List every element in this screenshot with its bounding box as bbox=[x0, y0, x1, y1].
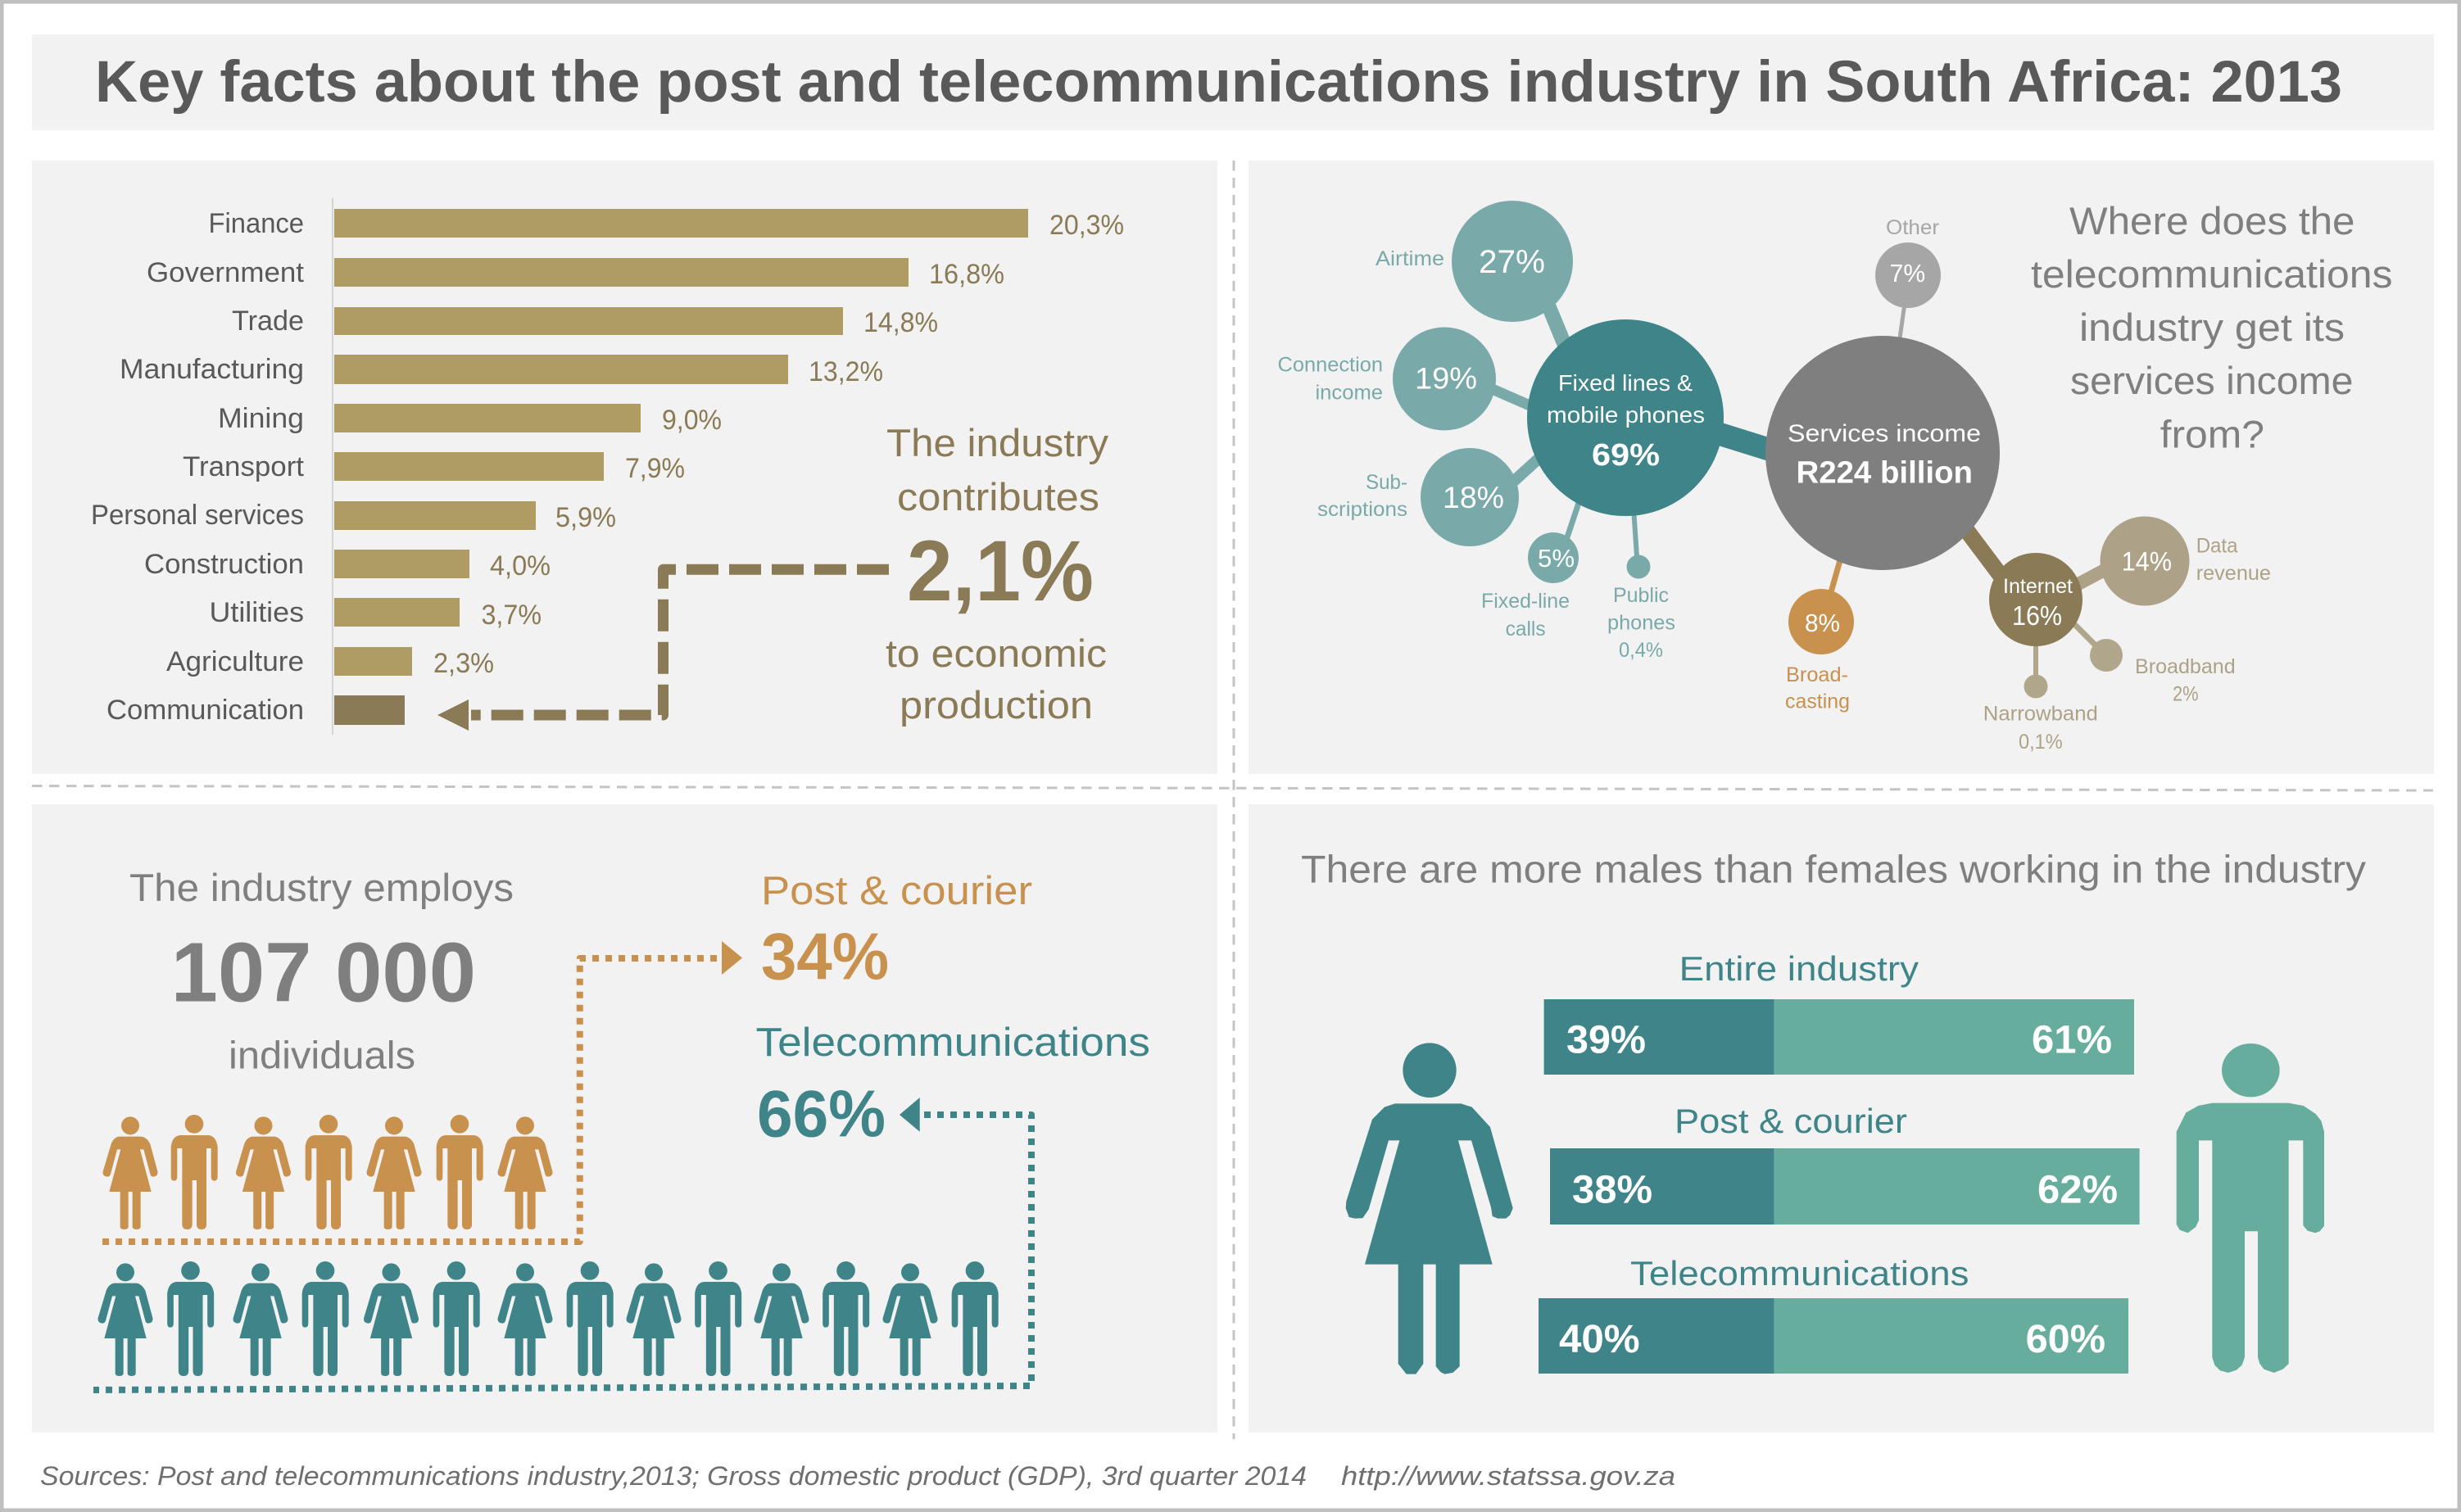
arrow: callout to communication bar bbox=[437, 569, 889, 731]
bubbles bbox=[1393, 201, 2189, 698]
icons: post and courier workers bbox=[103, 1115, 552, 1229]
category labels: Utilities bbox=[210, 597, 304, 628]
stacked bar: telecommunications bbox=[1539, 1254, 2128, 1374]
heading: where does income come from: from? bbox=[2160, 413, 2264, 456]
bubble values: Fixed lines & bbox=[1558, 370, 1693, 396]
internet sub-labels: 0,1% bbox=[2019, 731, 2063, 754]
callout: industry contributes 2,1%: 2,1% bbox=[907, 523, 1094, 619]
teal bubble labels: Sub- bbox=[1366, 471, 1407, 494]
internet sub-labels: revenue bbox=[2196, 562, 2271, 585]
category labels: Construction bbox=[144, 549, 304, 580]
category labels: Mining bbox=[218, 403, 304, 434]
internet sub-labels: 2% bbox=[2173, 683, 2199, 706]
telecommunications share: Telecommunications bbox=[755, 1021, 1150, 1065]
bubble values: Services income bbox=[1788, 420, 1981, 447]
post and courier share: 34% bbox=[761, 921, 889, 994]
value labels bbox=[433, 210, 1124, 679]
category labels: Trade bbox=[232, 306, 304, 337]
bubble values: 27% bbox=[1479, 244, 1545, 280]
bubble values: 16% bbox=[2012, 600, 2062, 631]
category labels: Agriculture bbox=[166, 646, 304, 677]
bubble values: 69% bbox=[1592, 438, 1660, 473]
value labels: 20,3% bbox=[1049, 210, 1124, 241]
heading: more males than females: There are more males than females working in the industry bbox=[1301, 847, 2367, 891]
bubble values: R224 billion bbox=[1796, 455, 1973, 490]
teal bubble labels: Public bbox=[1613, 584, 1669, 607]
arrow: post and courier bbox=[102, 941, 742, 1242]
category labels: Government bbox=[147, 257, 305, 288]
stacked bar: post and courier: Post & courier bbox=[1675, 1102, 1907, 1140]
category labels bbox=[91, 208, 305, 726]
callout: industry contributes 2,1%: to economic bbox=[886, 632, 1107, 675]
stacked bar: entire industry: 61% bbox=[2032, 1018, 2112, 1062]
icon: man bbox=[2177, 1043, 2324, 1373]
teal bubble labels: scriptions bbox=[1317, 498, 1407, 521]
panel: gender split bbox=[1249, 804, 2434, 1433]
footer: sources: Sources: Post and telecommunications industry,2013; Gross domestic product (GDP), 3rd quarter 2014 bbox=[40, 1461, 1307, 1491]
bubble values bbox=[1415, 244, 2172, 637]
heading: where does income come from: industry get its bbox=[2079, 306, 2345, 349]
callout: industry contributes 2,1% bbox=[886, 421, 1109, 727]
teal bubble labels: Connection bbox=[1278, 354, 1383, 377]
bubble values: 19% bbox=[1415, 362, 1477, 395]
bars bbox=[334, 209, 1028, 725]
employment headline: 107 000 bbox=[171, 926, 476, 1020]
internet sub-labels: Broadband bbox=[2135, 655, 2236, 678]
stacked bar: post and courier: 38% bbox=[1572, 1168, 1652, 1212]
value labels: 5,9% bbox=[555, 502, 616, 533]
panel: employment bbox=[32, 804, 1217, 1433]
value labels: 4,0% bbox=[490, 550, 551, 582]
teal bubble labels: phones bbox=[1607, 612, 1675, 635]
bubble values: Internet bbox=[2003, 575, 2073, 598]
teal bubble labels: calls bbox=[1506, 618, 1546, 641]
internet sub-labels: Narrowband bbox=[1983, 703, 2098, 726]
callout: industry contributes 2,1%: production bbox=[900, 683, 1093, 727]
panel: services income bubble diagram bbox=[1249, 161, 2434, 774]
value labels: 3,7% bbox=[482, 600, 542, 631]
stacked bar: entire industry: 39% bbox=[1566, 1018, 1646, 1062]
stacked bar: telecommunications: Telecommunications bbox=[1630, 1254, 1969, 1292]
callout: industry contributes 2,1%: The industry bbox=[886, 421, 1109, 464]
category labels: Transport bbox=[183, 451, 305, 482]
value labels: 9,0% bbox=[662, 405, 722, 436]
callout: industry contributes 2,1%: contributes bbox=[897, 475, 1099, 518]
stacked bar: post and courier bbox=[1550, 1102, 2140, 1225]
heading: where does income come from: services income bbox=[2070, 359, 2353, 402]
bubble values: 14% bbox=[2122, 546, 2172, 576]
value labels: 14,8% bbox=[863, 307, 938, 338]
post and courier share: Post & courier bbox=[761, 869, 1032, 913]
title bar bbox=[32, 34, 2434, 130]
internet sub-labels bbox=[1983, 534, 2271, 754]
stacked bar: entire industry bbox=[1544, 949, 2134, 1075]
bubble values: 8% bbox=[1805, 609, 1840, 637]
value labels: 13,2% bbox=[809, 356, 883, 387]
connectors bbox=[1483, 301, 2114, 680]
bubble values: 7% bbox=[1890, 259, 1925, 287]
teal bubble labels bbox=[1278, 247, 1675, 662]
post and courier share bbox=[761, 869, 1032, 994]
telecommunications share bbox=[755, 1021, 1150, 1152]
broadcasting label: Broad- bbox=[1786, 663, 1848, 686]
broadcasting label: casting bbox=[1785, 690, 1850, 713]
bubble values: mobile phones bbox=[1547, 402, 1705, 428]
value labels: 2,3% bbox=[433, 648, 494, 679]
value labels: 7,9% bbox=[625, 453, 685, 484]
employment headline bbox=[129, 866, 514, 1077]
footer: sources: http://www.statssa.gov.za bbox=[1341, 1461, 1675, 1491]
stacked bar: entire industry: Entire industry bbox=[1679, 949, 1919, 988]
bubble values: 18% bbox=[1443, 481, 1504, 514]
icons: telecommunications workers bbox=[98, 1261, 999, 1376]
other label: Other bbox=[1886, 216, 1939, 239]
employment headline: The industry employs bbox=[129, 866, 514, 909]
bubble values: 5% bbox=[1538, 544, 1575, 573]
panel: economic contribution bar chart bbox=[32, 161, 1217, 774]
broadcasting label bbox=[1785, 663, 1850, 713]
teal bubble labels: 0,4% bbox=[1619, 639, 1663, 662]
category labels: Personal services bbox=[91, 500, 304, 531]
value labels: 16,8% bbox=[929, 259, 1004, 290]
icon: woman bbox=[1346, 1043, 1513, 1374]
heading: where does income come from: telecommunications bbox=[2031, 252, 2392, 296]
category labels: Manufacturing bbox=[120, 354, 304, 385]
arrow: telecommunications bbox=[93, 1098, 1031, 1390]
heading: where does income come from bbox=[2031, 199, 2392, 456]
teal bubble labels: Fixed-line bbox=[1481, 590, 1570, 613]
telecommunications share: 66% bbox=[757, 1078, 886, 1152]
stacked bar: post and courier: 62% bbox=[2037, 1168, 2118, 1212]
internet sub-labels: Data bbox=[2196, 534, 2238, 557]
stacked bar: telecommunications: 60% bbox=[2026, 1318, 2105, 1361]
heading: where does income come from: Where does the bbox=[2069, 199, 2354, 242]
employment headline: individuals bbox=[229, 1034, 415, 1077]
category labels: Finance bbox=[208, 208, 304, 239]
title: Key facts about the post and telecommunications industry in South Africa: 2013 bbox=[95, 50, 2342, 115]
teal bubble labels: income bbox=[1316, 382, 1383, 405]
category labels: Communication bbox=[107, 695, 304, 726]
stacked bar: telecommunications: 40% bbox=[1559, 1318, 1640, 1361]
teal bubble labels: Airtime bbox=[1376, 247, 1444, 270]
